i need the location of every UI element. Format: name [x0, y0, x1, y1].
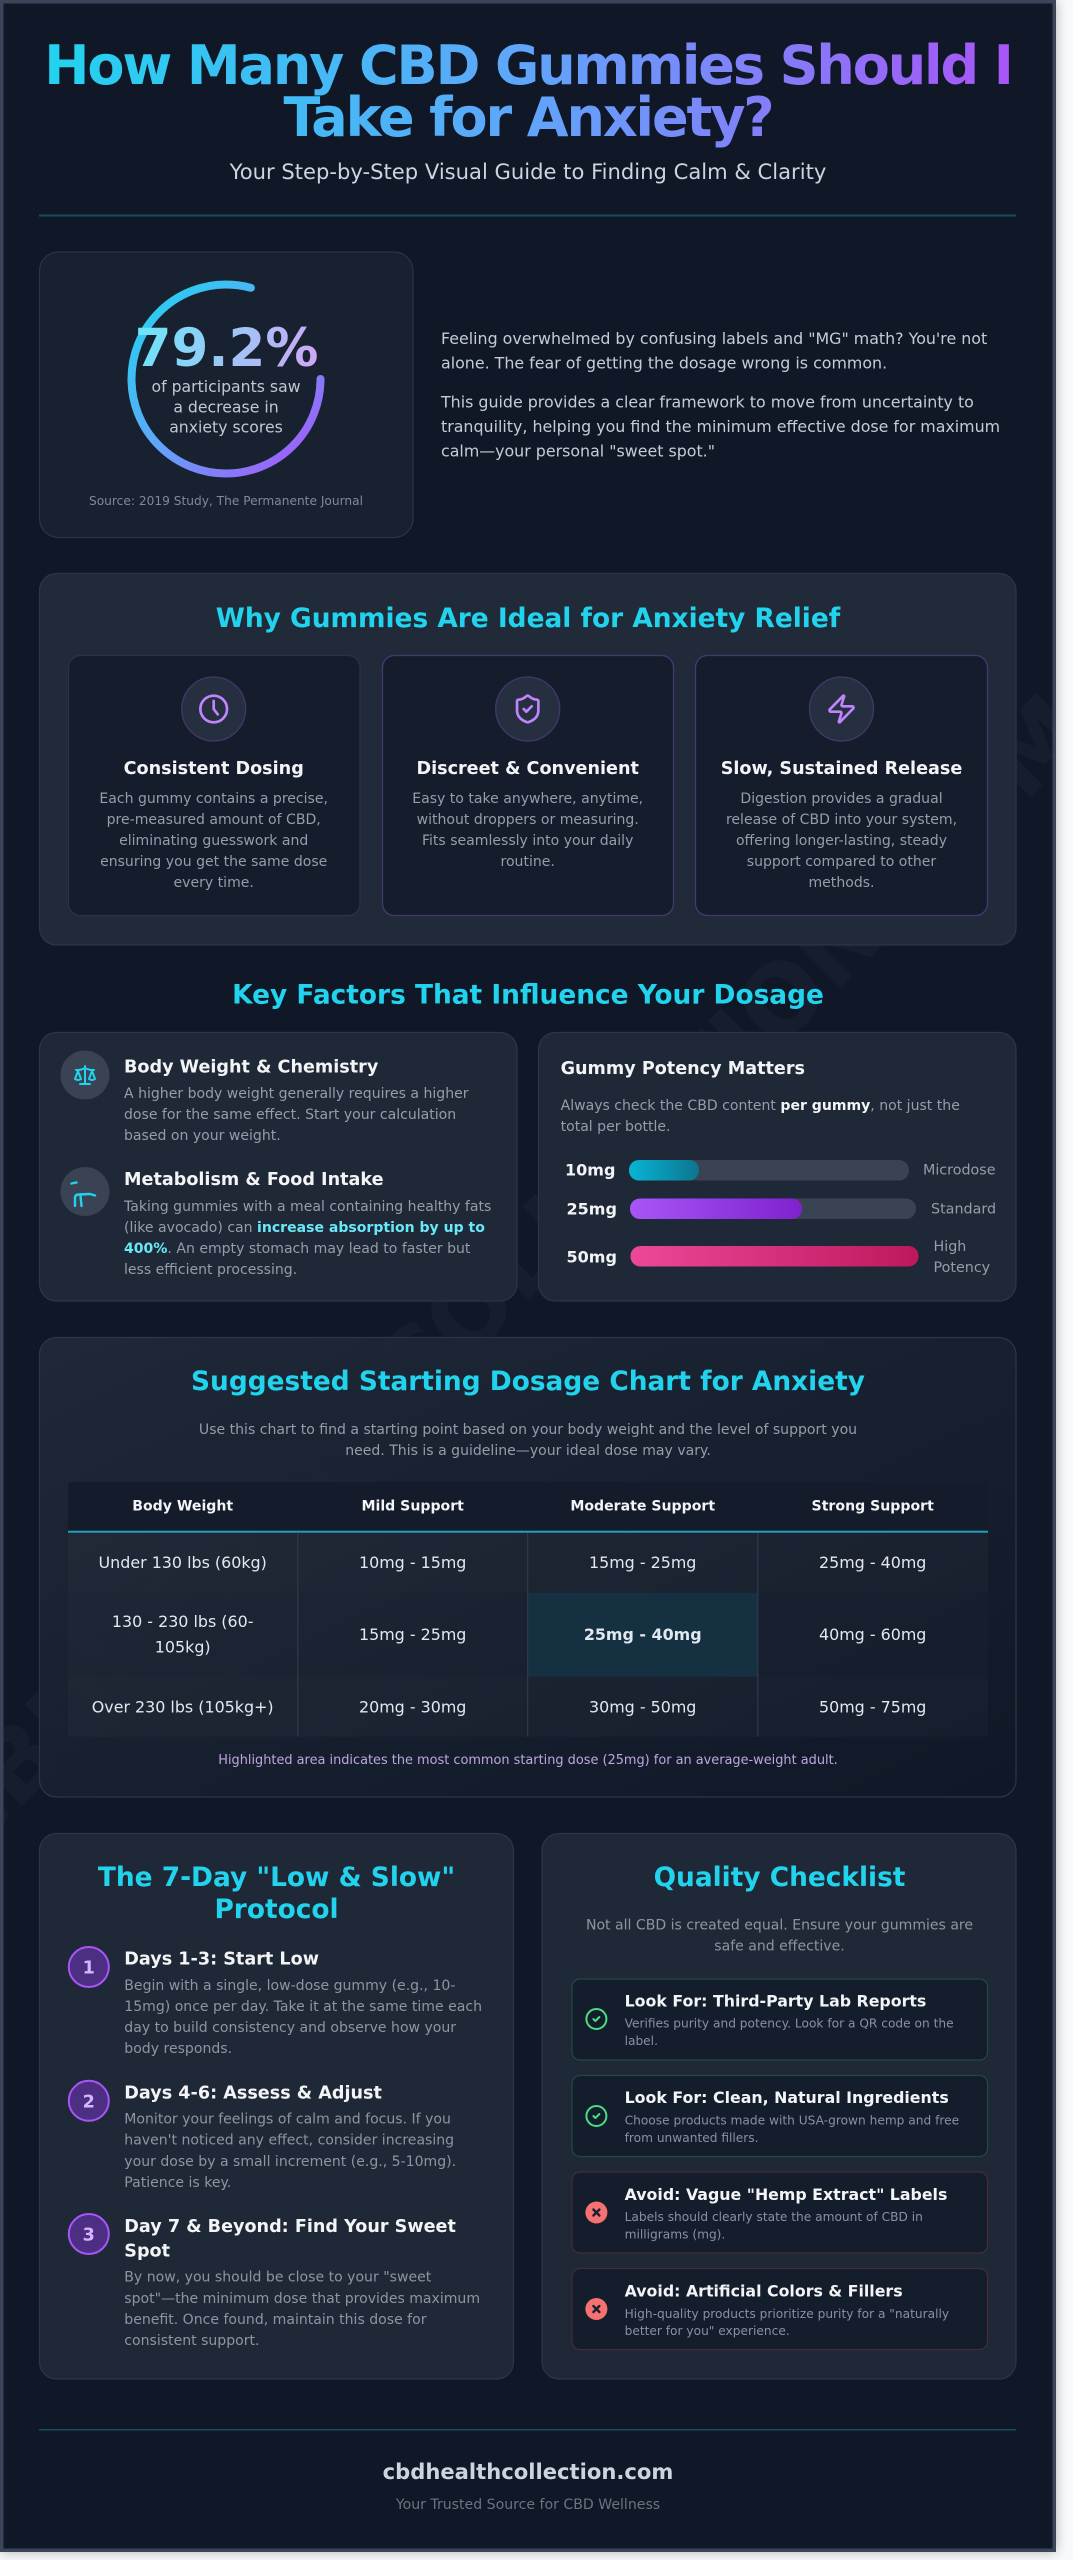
card body: every time.	[174, 875, 254, 891]
panel: 7-day protocol	[40, 1834, 514, 2379]
icon: scale	[60, 1050, 110, 1100]
row: 130-230 lbs: 40mg - 60mg	[819, 1625, 926, 1644]
item: lab reports: label.	[625, 2034, 658, 2048]
row: 130-230 lbs	[112, 1612, 926, 1657]
card body: ensuring you get the same dose	[100, 854, 327, 870]
item: lab reports: Verifies purity and potency. Look for a QR code on the	[625, 2017, 954, 2031]
stat label: a decrease in	[173, 398, 279, 416]
heading: Protocol	[214, 1894, 339, 1925]
item: natural ingredients	[572, 2076, 988, 2156]
step 1: Begin with a single, low-dose gummy (e.g., 10-	[124, 1978, 455, 1994]
row: under 130 lbs: 15mg - 25mg	[589, 1553, 696, 1572]
card: consistent dosing	[68, 656, 360, 916]
step 2: haven't noticed any effect, consider increasing	[124, 2133, 454, 2149]
card body: support compared to other	[747, 854, 936, 870]
icon: clock	[182, 677, 246, 741]
card body: pre-measured amount of CBD,	[107, 812, 321, 828]
factor title: Metabolism & Food Intake	[124, 1170, 384, 1190]
intro text: tranquility, helping you find the minimum effective dose for maximum	[441, 417, 1000, 436]
icon: check	[586, 2009, 606, 2029]
card body: eliminating guesswork and	[119, 833, 308, 849]
step 2: 2	[83, 2092, 95, 2112]
stat number: 79.2%	[135, 318, 318, 379]
icon: utensils	[60, 1167, 110, 1216]
intro text: calm—your personal "sweet spot."	[441, 442, 715, 460]
item: natural ingredients: from unwanted fillers.	[625, 2131, 759, 2145]
panel: potency	[538, 1032, 1016, 1301]
header	[44, 34, 1012, 184]
factor body: A higher body weight generally requires a higher	[124, 1086, 469, 1102]
bar 10mg: Microdose	[923, 1162, 996, 1178]
row: over 230 lbs: 30mg - 50mg	[589, 1698, 696, 1717]
card body: without droppers or measuring.	[417, 812, 639, 828]
icon: cross	[585, 2298, 607, 2320]
bar 50mg	[566, 1239, 991, 1276]
table header: Moderate Support	[570, 1499, 715, 1515]
step 2: Monitor your feelings of calm and focus. If you	[124, 2112, 451, 2128]
heading: Why Gummies Are Ideal for Anxiety Relief	[216, 603, 841, 634]
factor body: based on your weight.	[124, 1128, 281, 1144]
step 2	[69, 2081, 456, 2191]
factor body: . An empty stomach may lead to faster but	[167, 1241, 471, 1257]
intro text: Feeling overwhelmed by confusing labels and "MG" math? You're not	[441, 329, 987, 348]
footer site name: cbdhealthcollection.com	[383, 2459, 673, 2484]
item: artificial colors: Avoid: Artificial Colors & Fillers	[625, 2282, 903, 2301]
bar 25mg: Standard	[931, 1202, 996, 1218]
step 1: day to build consistency and observe how your	[124, 2020, 456, 2036]
row: over 230 lbs: 20mg - 30mg	[359, 1698, 466, 1717]
card title: Consistent Dosing	[124, 759, 304, 779]
step 3: spot"—the minimum dose that provides maximum	[124, 2291, 480, 2307]
step 3: Spot	[124, 2242, 170, 2262]
table header: Mild Support	[361, 1499, 464, 1515]
footer tagline: Your Trusted Source for CBD Wellness	[395, 2497, 660, 2513]
step 3	[69, 2214, 480, 2349]
step 2: Patience is key.	[124, 2175, 231, 2191]
item: lab reports	[572, 1979, 988, 2060]
step 3: consistent support.	[124, 2333, 259, 2349]
item: artificial colors: better for you" experience.	[625, 2324, 790, 2338]
checklist intro: safe and effective.	[714, 1939, 845, 1955]
potency text: total per bottle.	[561, 1119, 671, 1135]
row: under 130 lbs	[99, 1553, 926, 1572]
table header: Strong Support	[812, 1499, 934, 1515]
bar 25mg	[566, 1198, 996, 1219]
row: over 230 lbs	[92, 1698, 926, 1717]
heading: Quality Checklist	[654, 1862, 906, 1893]
bar chart: potency	[565, 1160, 996, 1276]
factor body: 400%	[124, 1241, 167, 1257]
row: under 130 lbs: 10mg - 15mg	[359, 1553, 466, 1572]
item: hemp extract: Avoid: Vague "Hemp Extract" Labels	[625, 2185, 947, 2204]
row: over 230 lbs: Over 230 lbs (105kg+)	[92, 1698, 274, 1717]
factor title: Body Weight & Chemistry	[124, 1058, 379, 1078]
bar 10mg	[565, 1160, 996, 1180]
heading: key factors: Key Factors That Influence Your Dosage	[232, 980, 824, 1010]
item: hemp extract: Labels should clearly state the amount of CBD in	[625, 2210, 923, 2224]
bar 10mg: 10mg	[565, 1160, 615, 1180]
item: hemp extract	[572, 2172, 988, 2253]
item: artificial colors	[572, 2268, 988, 2350]
stat label: of participants saw	[151, 377, 301, 396]
table header	[132, 1499, 934, 1515]
chart intro: need. This is a guideline—your ideal dose may vary.	[345, 1443, 711, 1459]
step 3: By now, you should be close to your "sweet	[124, 2270, 432, 2286]
card title: Discreet & Convenient	[416, 759, 639, 779]
step 3: Day 7 & Beyond: Find Your Sweet	[124, 2217, 456, 2237]
row: 130-230 lbs: 25mg - 40mg	[584, 1625, 702, 1644]
row: under 130 lbs: 25mg - 40mg	[819, 1553, 926, 1572]
panel: why gummies	[40, 574, 1016, 945]
bar 50mg: 50mg	[566, 1248, 617, 1266]
item: natural ingredients: Choose products made with USA-grown hemp and free	[625, 2113, 959, 2127]
dosage table	[68, 1482, 988, 1737]
card body: methods.	[808, 875, 875, 891]
card: discreet	[382, 656, 674, 916]
intro text: alone. The fear of getting the dosage wrong is common.	[441, 354, 887, 372]
step 1	[69, 1947, 482, 2057]
bar 50mg: Potency	[934, 1260, 991, 1276]
factor body: dose for the same effect. Start your calculation	[124, 1107, 456, 1123]
bar 50mg: High	[934, 1239, 966, 1255]
intro text: This guide provides a clear framework to move from uncertainty to	[440, 392, 974, 412]
step 1: body responds.	[124, 2041, 232, 2057]
factor body: Taking gummies with a meal containing healthy fats	[123, 1199, 491, 1215]
panel: dosage chart	[40, 1338, 1016, 1797]
heading: The 7-Day "Low & Slow"	[98, 1862, 455, 1893]
card body: offering longer-lasting, steady	[736, 833, 947, 849]
row: under 130 lbs: Under 130 lbs (60kg)	[99, 1553, 267, 1572]
potency text: Always check the CBD content per gummy, not just the	[561, 1098, 960, 1114]
heading: Suggested Starting Dosage Chart for Anxiety	[191, 1366, 865, 1397]
row: 130-230 lbs: 105kg)	[155, 1638, 211, 1657]
step 1: Days 1-3: Start Low	[124, 1950, 319, 1970]
step 3: benefit. Once found, maintain this dose for	[124, 2312, 427, 2328]
bar 25mg: 25mg	[566, 1200, 617, 1218]
panel: stat card	[40, 252, 413, 538]
step 2: your dose by a small increment (e.g., 5-10mg).	[124, 2154, 456, 2170]
step 3: 3	[83, 2226, 95, 2246]
footer	[383, 2459, 673, 2513]
chart note: Highlighted area indicates the most common starting dose (25mg) for an average-weight adult.	[218, 1753, 838, 1768]
panel: body factors	[40, 1032, 517, 1301]
step 1: 1	[83, 1958, 95, 1978]
progress ring 79.2%	[132, 284, 320, 474]
table header: Body Weight	[132, 1499, 233, 1515]
card body: release of CBD into your system,	[726, 812, 957, 828]
item: natural ingredients: Look For: Clean, Natural Ingredients	[625, 2088, 949, 2107]
item: lab reports: Look For: Third-Party Lab Reports	[625, 1992, 926, 2010]
card: sustained release	[696, 656, 988, 916]
item: artificial colors: High-quality products prioritize purity for a "naturally	[625, 2307, 949, 2321]
row: over 230 lbs: 50mg - 75mg	[819, 1698, 926, 1717]
item: hemp extract: milligrams (mg).	[625, 2228, 725, 2242]
step 1: 15mg) once per day. Take it at the same time each	[124, 1999, 482, 2015]
stat label: anxiety scores	[169, 418, 283, 436]
card body: Easy to take anywhere, anytime,	[412, 791, 643, 807]
checklist intro: Not all CBD is created equal. Ensure your gummies are	[586, 1918, 973, 1934]
source: Source: 2019 Study, The Permanente Journal	[89, 494, 363, 508]
subtitle: Your Step-by-Step Visual Guide to Finding Calm & Clarity	[229, 159, 826, 184]
panel: quality checklist	[542, 1834, 1016, 2379]
card body: Each gummy contains a precise,	[99, 791, 328, 807]
title: How Many CBD Gummies Should I	[44, 34, 1012, 97]
factor body: less efficient processing.	[124, 1262, 297, 1278]
card body: Fits seamlessly into your daily	[422, 833, 633, 849]
card body: Digestion provides a gradual	[740, 791, 943, 807]
potency heading: Gummy Potency Matters	[561, 1059, 805, 1079]
factor body: (like avocado) can increase absorption by up to	[124, 1220, 485, 1236]
card body: routine.	[501, 854, 555, 870]
row: 130-230 lbs: 15mg - 25mg	[359, 1625, 466, 1644]
title: Take for Anxiety?	[283, 86, 773, 149]
icon: bolt	[810, 677, 874, 741]
icon: shield	[496, 677, 560, 741]
chart intro: Use this chart to find a starting point based on your body weight and the level of support you	[199, 1422, 857, 1438]
icon: cross	[585, 2202, 607, 2224]
step 2: Days 4-6: Assess & Adjust	[124, 2083, 382, 2103]
row: 130-230 lbs: 130 - 230 lbs (60-	[112, 1612, 253, 1631]
icon: check	[586, 2106, 606, 2126]
card title: Slow, Sustained Release	[721, 759, 962, 779]
